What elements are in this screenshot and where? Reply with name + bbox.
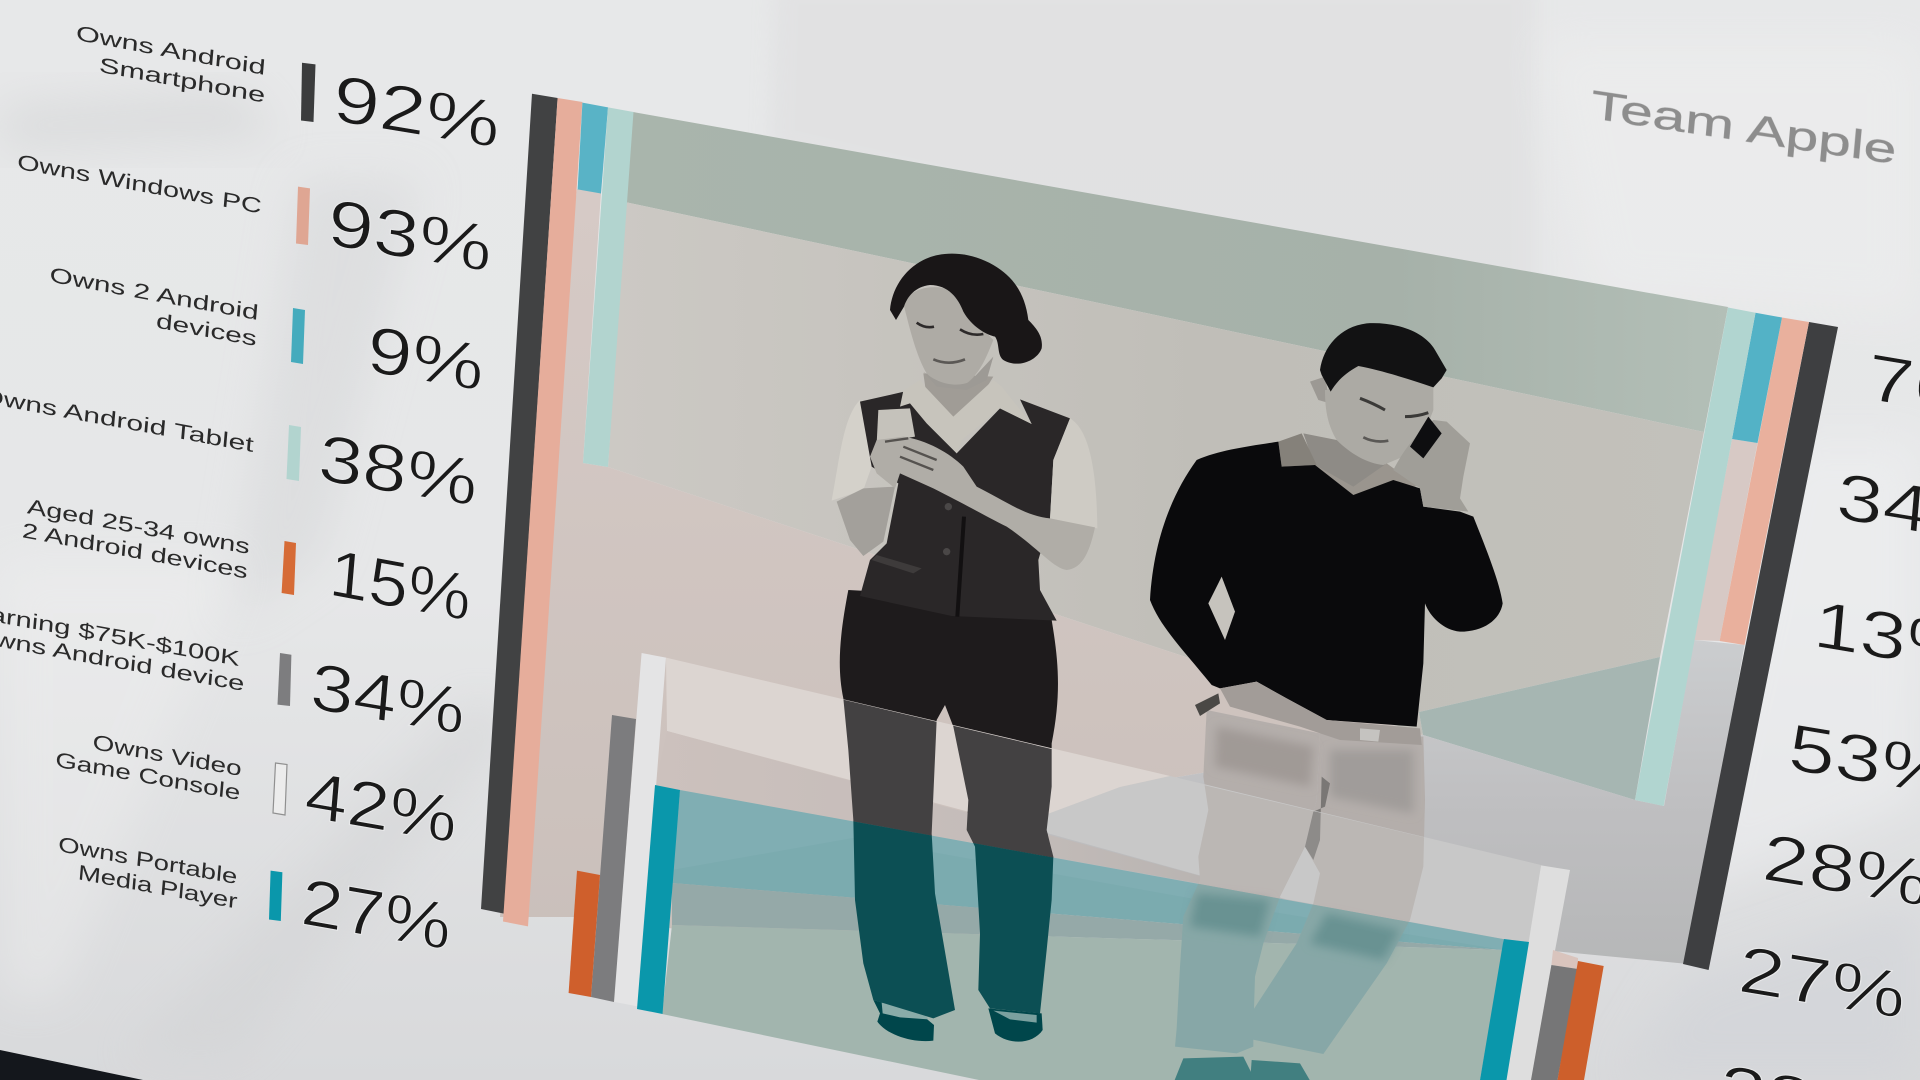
woman: upper body [832,254,1097,621]
right bars [1635,308,1838,970]
flow band: pink [500,189,1423,1000]
flow band: top green [625,112,1728,432]
legend item: Aged 25-34 owns 2 Android devices 15%: 15% [326,534,474,635]
woman: legs [840,590,1058,1042]
right column: percentages [1717,340,1920,1080]
legend item: Owns 2 Android devices 9%: devices [155,308,258,351]
legend item: Owns Windows PC 93% [16,150,495,286]
legend item: Owns Windows PC 93%: Owns Windows PC [16,150,263,218]
lower panel: teal lighter wedge [672,838,1503,950]
flow band: gray right [1045,640,1744,964]
legend item: Owns Portable Media Player 27%: 27% [299,865,454,965]
legend item: Owns 2 Android devices 9% [49,262,487,405]
legend item: Owns Android Smartphone 92% [75,21,503,163]
legend item: Owns Android Tablet 38% [0,383,481,520]
left bars [481,94,634,926]
lower bars left [569,653,680,1014]
legend item: Owns Portable Media Player 27%: Media Player [77,861,238,914]
lower panel: pale pink band [666,658,1170,825]
legend item: Aged 25-34 owns 2 Android devices 15%: Aged 25-34 owns [26,495,251,559]
photo overlay: legs under teal band [853,821,1408,1080]
legend item: Owns Android Smartphone 92%: Smartphone [98,53,266,107]
heading: Team Apple: Team Apple [1589,82,1898,173]
legend item: Owns Android Tablet 38%: 38% [316,420,481,520]
photo: two people with phones [832,254,1503,1080]
lower panel: bottom green area [662,925,1503,1080]
legend item: Aged 25-34 owns 2 Android devices 15% [21,495,474,635]
legend item: Owns 2 Android devices 9%: Owns 2 Android [49,262,260,325]
legend item: Owns Android Smartphone 92%: 92% [330,61,503,163]
flow band: beige [608,202,1704,735]
legend item: Owns Portable Media Player 27%: Owns Portable [57,833,238,889]
lower panel: gray wedge [672,883,1503,950]
legend item: Earning $75K-$100K owns Android device 34%: 34% [308,649,468,749]
lower panel: light gray band [1018,776,1541,942]
photo overlay: legs under white band [844,700,1424,922]
man: hair [1320,323,1447,392]
right column: percentages: 27% [1736,932,1908,1034]
flow band: teal triangle [1419,657,1660,800]
monitor bezel corner [0,1050,143,1080]
legend item: Owns 2 Android devices 9%: 9% [364,312,487,405]
legend item: Owns Video Game Console 42%: Owns Video [92,730,243,781]
lower panel: darker wedge [655,731,1285,899]
man: legs [1173,710,1425,1080]
man: upper body [1150,323,1503,745]
legend item: Owns Android Smartphone 92%: Owns Android [75,21,267,80]
lower panel: teal band [672,790,1503,950]
legend item: Owns Video Game Console 42%: Game Console [54,748,241,805]
legend item: Owns Video Game Console 42%: 42% [302,758,460,858]
legend item: Owns Portable Media Player 27% [57,833,454,965]
legend item: Aged 25-34 owns 2 Android devices 15%: 2 Android devices [21,519,249,584]
legend item: Earning $75K-$100K owns Android device 34% [0,599,468,749]
legend item: Owns Windows PC 93%: 93% [325,184,495,286]
legend item: Owns Video Game Console 42% [54,730,460,858]
pale pink strip right [1694,439,1758,641]
lower bars right [1480,865,1604,1080]
